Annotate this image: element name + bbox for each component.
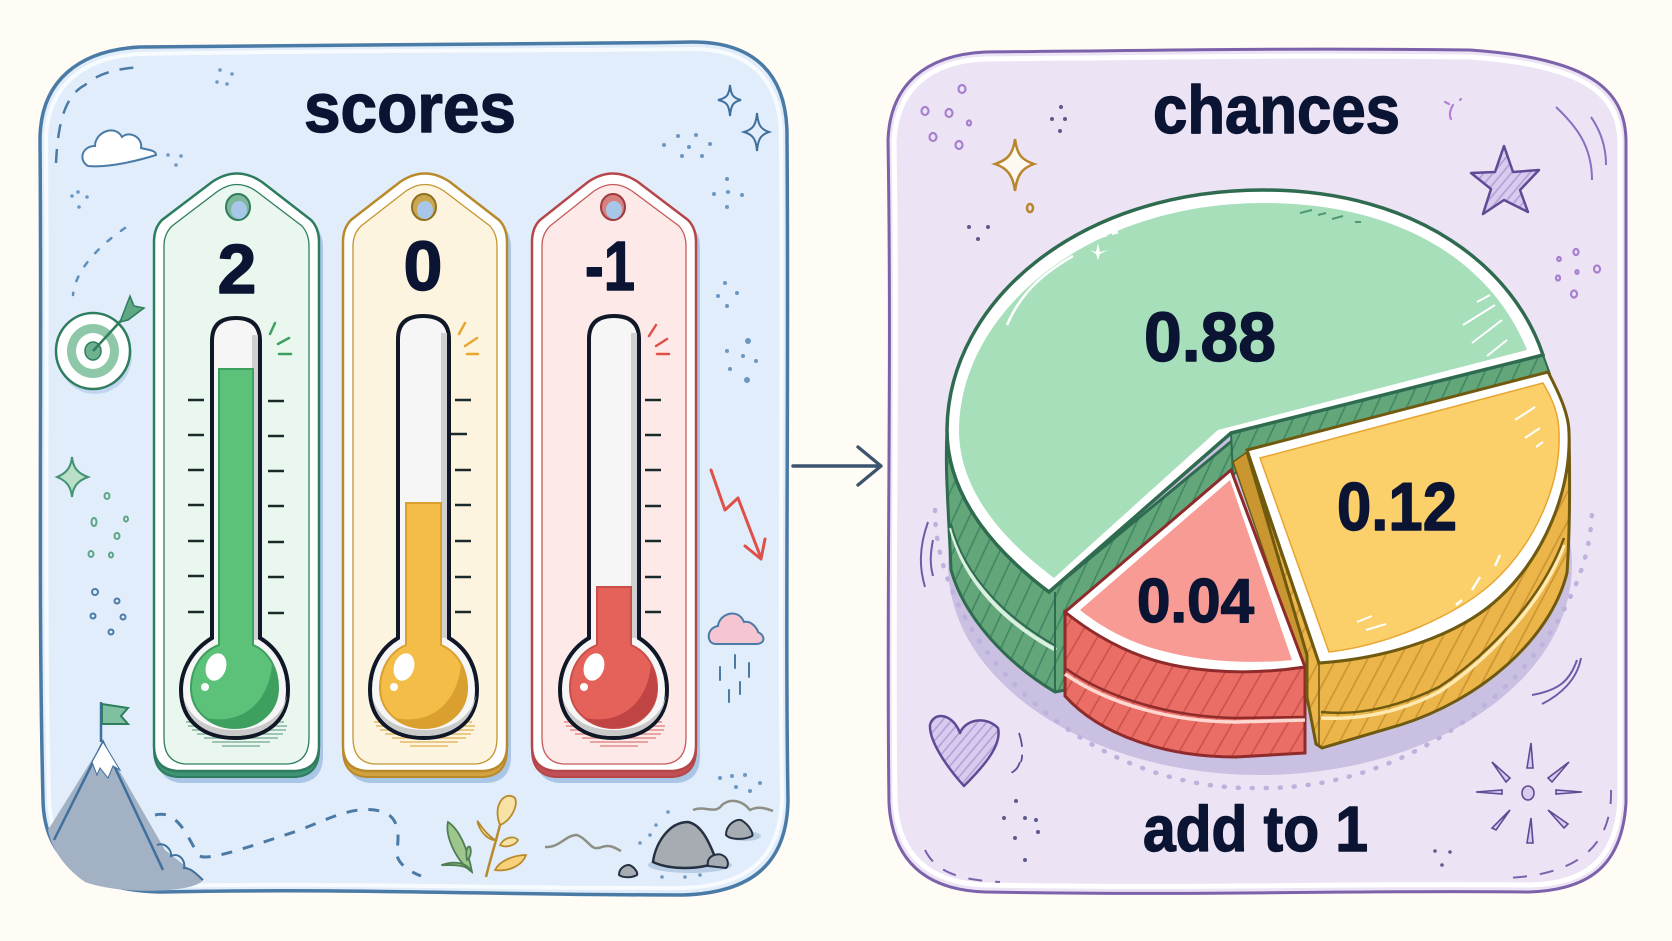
icon: purple star: [1471, 146, 1539, 214]
scale ticks: [451, 400, 471, 612]
icon: blue sparkles: [718, 85, 769, 151]
thermometer card: 2: [154, 174, 323, 783]
bulb hatching: [564, 722, 665, 746]
hanging hole: [601, 194, 625, 220]
scale ticks: [188, 400, 284, 613]
slice: yellow side: [1247, 433, 1570, 748]
decoration: purple dots: [922, 85, 1600, 298]
label: 0.04: 0.04: [1137, 567, 1255, 636]
slice: yellow 0.12 top: [1247, 372, 1569, 663]
bulb hatching: [186, 722, 287, 746]
hanging hole: [412, 194, 436, 220]
icon: plants: [442, 796, 526, 877]
decoration: motion lines: [921, 522, 1581, 704]
decoration: dashed corner curve: [56, 67, 144, 163]
icon: heart: [930, 716, 999, 786]
slice: green strip under top edge: [1231, 355, 1550, 476]
slice: green side: [946, 430, 1233, 692]
value: 0: 0: [404, 227, 442, 305]
decoration: hills: [545, 835, 621, 851]
hanging hole: [226, 194, 250, 220]
scale ticks: [645, 400, 661, 612]
rays: [649, 325, 669, 354]
value: 2: 2: [218, 230, 256, 308]
panel: chances: [888, 49, 1627, 893]
slice: red side: [1065, 612, 1305, 757]
thermometer card: -1: [532, 174, 700, 783]
slice: red 0.04 top: [1065, 470, 1305, 672]
arrow: scores to chances: [793, 447, 881, 485]
icon: burst: [1476, 743, 1582, 843]
decoration: blue dots: [90, 589, 126, 634]
decoration: dashed arc above target: [73, 228, 125, 295]
caption: add to 1: add to 1: [1143, 793, 1368, 865]
icon: rocks: [619, 820, 761, 877]
panel: scores: [40, 42, 788, 895]
decoration: green dots: [88, 493, 128, 558]
icon: cloud: [82, 130, 156, 166]
decoration: dots by rocks: [638, 773, 762, 879]
thermometer: [181, 318, 288, 738]
value: -1: -1: [585, 227, 635, 305]
decoration: dashed trail: [155, 809, 421, 876]
thermometer: [560, 316, 667, 738]
icon: mountain with flag: [48, 702, 203, 891]
rays: [270, 323, 291, 354]
icon: green sparkle: [57, 457, 88, 497]
label: 0.12: 0.12: [1337, 469, 1457, 545]
rays: [459, 323, 478, 354]
icon: pink rain cloud: [709, 613, 763, 702]
slice: green 0.88 top: [947, 190, 1543, 592]
thermometer: [370, 316, 477, 738]
decoration: pink marks: [1445, 99, 1461, 119]
label: 0.88: 0.88: [1144, 298, 1276, 376]
3D pie chart: [946, 190, 1570, 757]
bulb hatching: [374, 722, 475, 746]
decoration: dark dots: [967, 105, 1452, 867]
slice: yellow inner face between red and yellow: [1233, 450, 1312, 672]
decoration: scattered dots: [70, 68, 758, 383]
decoration: corner arcs: [1556, 107, 1606, 180]
icon: red downward zigzag arrow: [711, 470, 765, 559]
heading: scores: scores: [304, 69, 516, 147]
decoration: dashed bottom corners: [925, 850, 1000, 882]
icon: heart arcs: [1008, 733, 1022, 774]
icon: gold sparkle: [995, 139, 1034, 212]
heading: chances: chances: [1153, 72, 1400, 148]
pie shadow: [935, 355, 1592, 788]
thermometer card: 0: [343, 174, 511, 783]
icon: target with arrow: [56, 296, 144, 394]
